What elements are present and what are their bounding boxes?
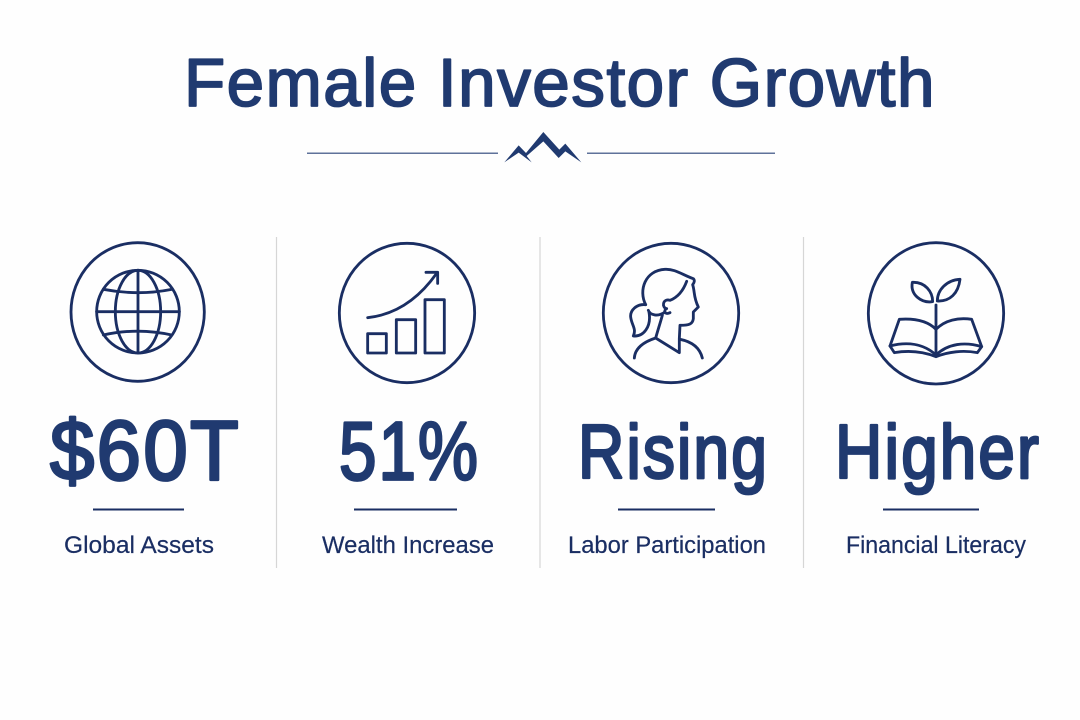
- panel: financial literacy: [835, 243, 1041, 559]
- panel: wealth increase: [322, 243, 494, 559]
- stat: $60T: $60T: [50, 404, 241, 498]
- panel: labor participation: [568, 243, 769, 559]
- title: Female Investor Growth: [184, 45, 936, 121]
- icon: book with sprout: [868, 243, 1004, 384]
- title divider with mountain icon: [307, 132, 775, 162]
- icon: bar chart with arrow: [339, 243, 475, 383]
- panel: global assets: [50, 243, 241, 559]
- icon: woman profile: [603, 243, 739, 383]
- label: global assets: Global Assets: [64, 532, 214, 559]
- stat: Rising: Rising: [578, 410, 769, 495]
- stat: 51%: 51%: [339, 404, 480, 498]
- label: wealth increase: Wealth Increase: [322, 532, 494, 559]
- stat: Higher: Higher: [835, 410, 1041, 495]
- label: financial literacy: Financial Literacy: [846, 532, 1026, 559]
- icon: globe: [71, 243, 204, 381]
- label: labor participation: Labor Participation: [568, 532, 766, 559]
